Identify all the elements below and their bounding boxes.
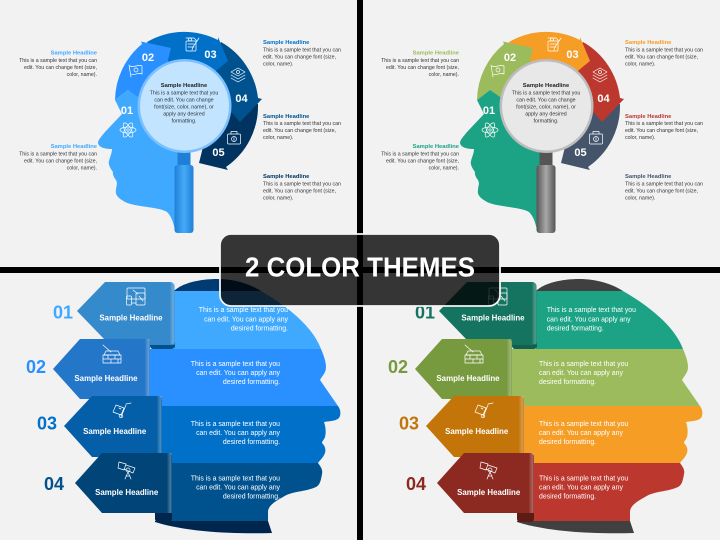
- band text 01: desired formatting.: [547, 325, 604, 332]
- lens text: font(size, color, name), or: [516, 104, 576, 110]
- magnifier handle: [536, 150, 556, 233]
- text block: 04: edit. You can change font (size,: [625, 128, 698, 134]
- head bottom cap: [155, 521, 272, 533]
- number 04: 04: [44, 474, 64, 494]
- text block: blue 01: color, name).: [67, 166, 97, 172]
- band text 02: [539, 361, 628, 386]
- text block: 03: color, name).: [625, 62, 655, 68]
- text block: 01: edit. You can change font (size,: [386, 158, 459, 164]
- text block: 04: [625, 114, 703, 141]
- icon: document: [548, 38, 561, 51]
- band text 04: desired formatting.: [539, 494, 596, 500]
- band 02: [148, 349, 338, 406]
- segment 05: [184, 104, 258, 170]
- number 03: 03: [566, 49, 579, 61]
- icon: telescope: [118, 462, 135, 479]
- tab headline 04: Sample Headline: [457, 488, 521, 497]
- band text 02: can edit. You can apply any: [196, 370, 281, 377]
- band text 03: desired formatting.: [223, 439, 280, 446]
- tab 03: [64, 396, 162, 457]
- lens text: This is a sample text that you: [150, 90, 218, 96]
- band text 03: This is a sample text that you: [191, 421, 280, 428]
- tab headline 03: Sample Headline: [445, 427, 509, 436]
- number 01: 01: [483, 105, 495, 117]
- band 04: [532, 463, 684, 521]
- band text 03: can edit. You can apply any: [196, 430, 281, 437]
- text block: 05: color, name).: [625, 196, 655, 202]
- tab 01: [77, 282, 174, 345]
- tab headline 01: Sample Headline: [99, 314, 163, 322]
- horizontal divider: [0, 267, 720, 273]
- number 03: 03: [399, 414, 419, 434]
- band text 03: desired formatting.: [539, 439, 596, 446]
- segment 01 head: [98, 90, 178, 230]
- band text 02: This is a sample text that you: [539, 361, 628, 368]
- band text 02: desired formatting.: [223, 379, 280, 386]
- number 05: 05: [574, 147, 587, 159]
- magnifier lens: [500, 59, 594, 153]
- tab 02: [53, 339, 150, 399]
- band 02: [510, 349, 700, 406]
- tab 04: [437, 453, 534, 513]
- text block: blue 05: This is a sample text that you can: [263, 182, 341, 188]
- text block: 02: Sample Headline: [413, 50, 460, 56]
- text block: blue 04: [263, 114, 341, 141]
- text block: 04: This is a sample text that you can: [625, 121, 703, 127]
- band text 02: This is a sample text that you: [191, 361, 280, 368]
- text block: blue 03: This is a sample text that you can: [263, 48, 341, 54]
- band text 04: can edit. You can apply any: [539, 484, 623, 492]
- vertical divider: [357, 0, 363, 540]
- text block: 05: edit. You can change font (size,: [625, 188, 698, 194]
- icon: document: [186, 38, 199, 51]
- text block: 05: Sample Headline: [625, 174, 672, 180]
- text block: 01: This is a sample text that you can: [381, 152, 459, 158]
- segment 03: [147, 32, 228, 106]
- band 03: [160, 406, 340, 463]
- band text 04: [539, 475, 628, 500]
- tab 04 fold shadow: [155, 510, 172, 522]
- number 03: 03: [37, 414, 57, 434]
- text block: blue 04: Sample Headline: [263, 114, 310, 120]
- band text 03: [191, 421, 281, 446]
- head top cap: [174, 279, 261, 291]
- text block: 05: This is a sample text that you can: [625, 182, 703, 188]
- panel: blue layered head: [26, 279, 340, 533]
- text block: blue 03: [263, 40, 341, 68]
- number 01: 01: [415, 302, 435, 322]
- lens text: [512, 83, 580, 124]
- head top cap: [536, 279, 623, 291]
- number 04: 04: [235, 93, 248, 105]
- text block: blue 02: edit. You can change font (size,: [24, 65, 97, 71]
- band text 01: This is a sample text that you: [199, 307, 288, 314]
- segment 04: [184, 42, 262, 122]
- lens text: formatting.: [533, 118, 559, 124]
- band text 03: [539, 421, 628, 446]
- icon: flag: [491, 65, 504, 77]
- lens text: apply any desired: [525, 112, 567, 118]
- panel: blue head magnifier diagram: [98, 32, 262, 233]
- panel: multicolor head magnifier diagram: [381, 32, 703, 233]
- icon: bag: [228, 132, 240, 144]
- tab 02: [415, 339, 512, 399]
- band 01: [174, 291, 321, 349]
- text block: blue 05: edit. You can change font (size,: [263, 188, 336, 194]
- text block: blue 02: This is a sample text that you can: [19, 58, 97, 64]
- segment 02: [115, 42, 184, 106]
- band text 04: desired formatting.: [223, 494, 280, 500]
- text block: 04: color, name).: [625, 135, 655, 141]
- text block: blue 03: edit. You can change font (size,: [263, 54, 336, 60]
- segment 03: [509, 32, 590, 106]
- icon: flag: [129, 65, 142, 77]
- lens text: font(size, color, name), or: [154, 104, 214, 110]
- text block: blue 03: color, name).: [263, 62, 293, 68]
- text block: blue 05: Sample Headline: [263, 174, 310, 180]
- band text 01: desired formatting.: [231, 325, 288, 332]
- text block: blue 02: Sample Headline: [51, 50, 98, 56]
- tab headline 01: Sample Headline: [461, 314, 525, 322]
- number 02: 02: [142, 52, 154, 64]
- text block: blue 01: Sample Headline: [51, 144, 98, 150]
- tab 03: [426, 396, 524, 457]
- text block: blue 04: This is a sample text that you can: [263, 121, 341, 127]
- number 04: 04: [406, 474, 426, 494]
- text block: blue 02: [19, 50, 98, 78]
- band text 03: This is a sample text that you: [539, 421, 628, 428]
- band text 02: desired formatting.: [539, 379, 596, 386]
- band text 02: [191, 361, 281, 386]
- number 01: 01: [53, 302, 73, 322]
- text block: 03: Sample Headline: [625, 40, 672, 46]
- band 04: [170, 463, 322, 521]
- text block: blue 04: edit. You can change font (size,: [263, 128, 336, 134]
- band text 04: This is a sample text that you: [539, 475, 628, 482]
- tab 01 fold shadow: [150, 341, 175, 349]
- banner box: [220, 234, 500, 306]
- icon: devices: [126, 288, 145, 305]
- number 04: 04: [597, 93, 610, 105]
- magnifier lens: [138, 59, 232, 153]
- band text 04: This is a sample text that you: [191, 475, 280, 482]
- text block: blue 02: color, name).: [67, 72, 97, 78]
- segment 04: [546, 42, 624, 122]
- text block: blue 05: [263, 174, 341, 202]
- number 02: 02: [388, 357, 408, 377]
- number 02: 02: [504, 52, 516, 64]
- icon: hand truck: [475, 403, 493, 418]
- lens text: can edit. You can change: [516, 98, 576, 104]
- icon: devices: [488, 288, 507, 305]
- segment 01 head: [460, 90, 540, 230]
- band text 04: [191, 475, 281, 500]
- number 02: 02: [26, 357, 46, 377]
- band text 01: [199, 307, 289, 332]
- icon: telescope: [480, 462, 497, 479]
- segment 05: [546, 104, 620, 170]
- band text 01: This is a sample text that you: [547, 307, 636, 314]
- text block: 03: [625, 40, 703, 68]
- magnifier handle: [174, 150, 194, 233]
- text block: blue 01: edit. You can change font (size,: [24, 158, 97, 164]
- head bottom cap: [517, 521, 634, 533]
- panel: multicolor layered head: [388, 279, 702, 533]
- icon: atom: [120, 122, 136, 138]
- tab headline 02: Sample Headline: [436, 374, 500, 383]
- band text 01: can edit. You can apply any: [547, 316, 631, 323]
- segment 02: [477, 42, 546, 106]
- icon: bricks: [465, 345, 483, 363]
- tab 04: [75, 453, 172, 513]
- text block: blue 03: Sample Headline: [263, 40, 310, 46]
- text block: 01: color, name).: [429, 166, 459, 172]
- band text 01: can edit. You can apply any: [204, 316, 289, 323]
- band text 01: [547, 307, 636, 332]
- lens text: can edit. You can change: [154, 98, 214, 104]
- icon: bag: [590, 132, 602, 144]
- band text 04: can edit. You can apply any: [196, 484, 281, 492]
- text block: 04: Sample Headline: [625, 114, 672, 120]
- number 05: 05: [212, 147, 225, 159]
- number 03: 03: [204, 49, 217, 61]
- tab 01 fold shadow: [512, 341, 537, 349]
- icon: stack: [231, 68, 245, 82]
- lens text: Sample Headline: [161, 83, 208, 89]
- text block: blue 01: This is a sample text that you can: [19, 152, 97, 158]
- number 01: 01: [121, 105, 133, 117]
- icon: hand truck: [113, 403, 131, 418]
- lens text: Sample Headline: [523, 83, 570, 89]
- title banner: [220, 234, 500, 306]
- icon: bricks: [103, 345, 121, 363]
- text block: 02: [381, 50, 460, 78]
- band text 03: can edit. You can apply any: [539, 430, 623, 437]
- text block: blue 04: color, name).: [263, 135, 293, 141]
- lens text: [150, 83, 218, 124]
- text block: 02: color, name).: [429, 72, 459, 78]
- lens text: This is a sample text that you: [512, 90, 580, 96]
- banner title: 2 COLOR THEMES: [245, 252, 475, 283]
- tab headline 03: Sample Headline: [83, 427, 147, 436]
- band 01: [536, 291, 683, 349]
- band 03: [522, 406, 702, 463]
- icon: atom: [482, 122, 498, 138]
- text block: 05: [625, 174, 703, 202]
- icon: stack: [593, 68, 607, 82]
- text block: 03: This is a sample text that you can: [625, 48, 703, 54]
- text block: 01: [381, 144, 460, 172]
- tab headline 02: Sample Headline: [74, 374, 138, 383]
- tab headline 04: Sample Headline: [95, 488, 159, 497]
- tab 01: [439, 282, 536, 345]
- text block: 03: edit. You can change font (size,: [625, 54, 698, 60]
- lens text: apply any desired: [163, 112, 205, 118]
- text block: blue 01: [19, 144, 98, 172]
- tab 04 fold shadow: [517, 510, 534, 522]
- text block: blue 05: color, name).: [263, 196, 293, 202]
- lens text: formatting.: [171, 118, 197, 124]
- band text 02: can edit. You can apply any: [539, 370, 623, 377]
- text block: 01: Sample Headline: [413, 144, 460, 150]
- text block: 02: edit. You can change font (size,: [386, 65, 459, 71]
- text block: 02: This is a sample text that you can: [381, 58, 459, 64]
